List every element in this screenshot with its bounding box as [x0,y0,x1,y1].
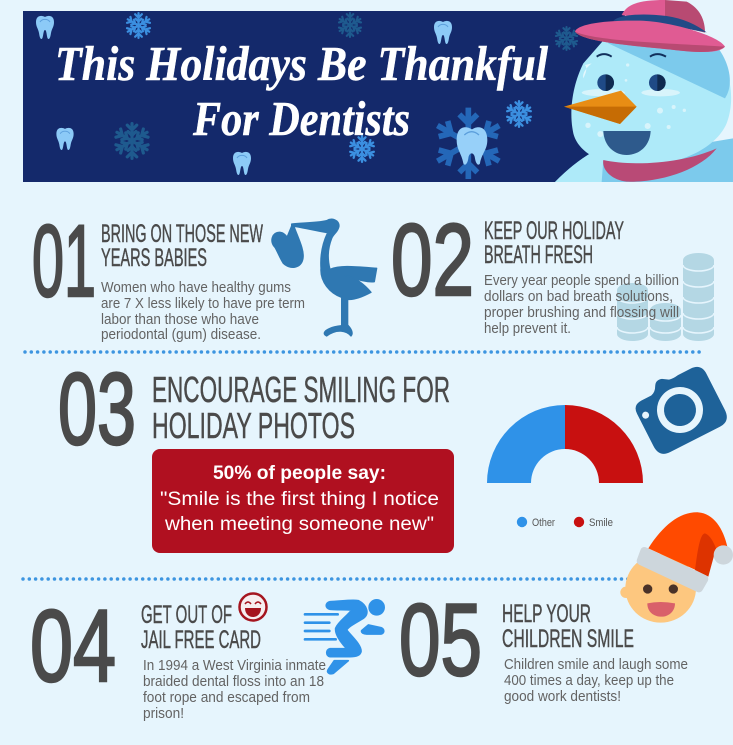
heading 02 [484,217,624,269]
icon: snowflake [555,27,578,50]
text block 05: 400 times a day, keep up the [504,673,674,689]
panel: tip 02 [391,203,679,337]
icon: child in santa hat [620,512,733,623]
text block 04 [143,658,326,722]
text block 02: proper brushing and flossing will [484,305,679,321]
heading 05: HELP YOUR [502,600,591,628]
text block 02 [484,273,679,337]
semi-donut chart [487,405,643,483]
icon: snowflake [115,124,149,158]
icon: camera [628,359,731,458]
panel: tip 05 [399,583,688,705]
title: This Holidays Be Thankful [55,36,548,91]
number 01: 01 [32,204,96,318]
number 03: 03 [58,352,136,466]
heading 02: KEEP OUR HOLIDAY [484,217,624,245]
number 04: 04 [30,589,116,703]
header banner [23,11,625,182]
heading 03 [152,369,450,446]
icon: tooth [434,21,452,44]
heading 05: CHILDREN SMILE [502,625,634,653]
icon: tooth [56,128,74,150]
callout: when meeting someone new" [164,514,434,535]
text block 05: good work dentists! [504,689,621,705]
icon: snowflake [338,13,362,37]
callout [152,449,454,553]
panel: tip 01 [32,204,377,343]
panel: tip 03 [58,352,454,553]
icon: stork carrying baby [272,219,377,336]
snowman illustration [555,0,733,182]
text block 04: foot rope and escaped from [143,690,310,706]
icon: running figure [305,599,385,674]
text block 01: are 7 X less likely to have pre term [101,296,305,312]
text block 04: In 1994 a West Virginia inmate [143,658,326,674]
callout: "Smile is the first thing I notice [160,489,439,510]
text block 01: labor than those who have [101,312,259,328]
heading 01: BRING ON THOSE NEW [101,220,263,248]
text block 01: periodontal (gum) disease. [101,327,261,343]
chart legend: Smile [589,517,613,529]
text block 04: prison! [143,706,184,722]
heading 02: BREATH FRESH [484,241,593,269]
heading 05 [502,600,634,653]
number 05: 05 [399,583,482,697]
text block 05 [504,657,688,705]
heading 04: JAIL FREE CARD [141,626,261,654]
heading 01 [101,220,263,272]
text block 02: dollars on bad breath solutions, [484,289,673,305]
title: For Dentists [192,91,410,146]
heading 04 [141,601,261,654]
panel: tip 04 [30,589,326,722]
text block 02: Every year people spend a billion [484,273,679,289]
icon: snowflake [506,101,532,127]
chart legend [517,517,613,529]
icon: laughing face [240,594,266,620]
icon: snowflake [126,13,151,38]
text block 01 [101,280,305,343]
callout: 50% of people say: [213,463,386,484]
text block 01: Women who have healthy gums [101,280,291,296]
heading 03: HOLIDAY PHOTOS [152,405,355,446]
heading 03: ENCOURAGE SMILING FOR [152,369,450,410]
heading 04: GET OUT OF [141,601,232,629]
number 02: 02 [391,203,474,317]
title [55,36,548,146]
text block 02: help prevent it. [484,321,571,337]
icon: tooth [36,16,54,39]
icon: snowflake [349,136,375,162]
heading 01: YEARS BABIES [101,244,207,272]
text block 05: Children smile and laugh some [504,657,688,673]
icon: big snowflake with tooth [433,108,504,179]
text block 04: braided dental floss into an 18 [143,674,324,690]
panel: tip 02 coins illustration [617,253,714,341]
chart legend: Other [532,517,555,529]
icon: tooth [233,152,251,175]
